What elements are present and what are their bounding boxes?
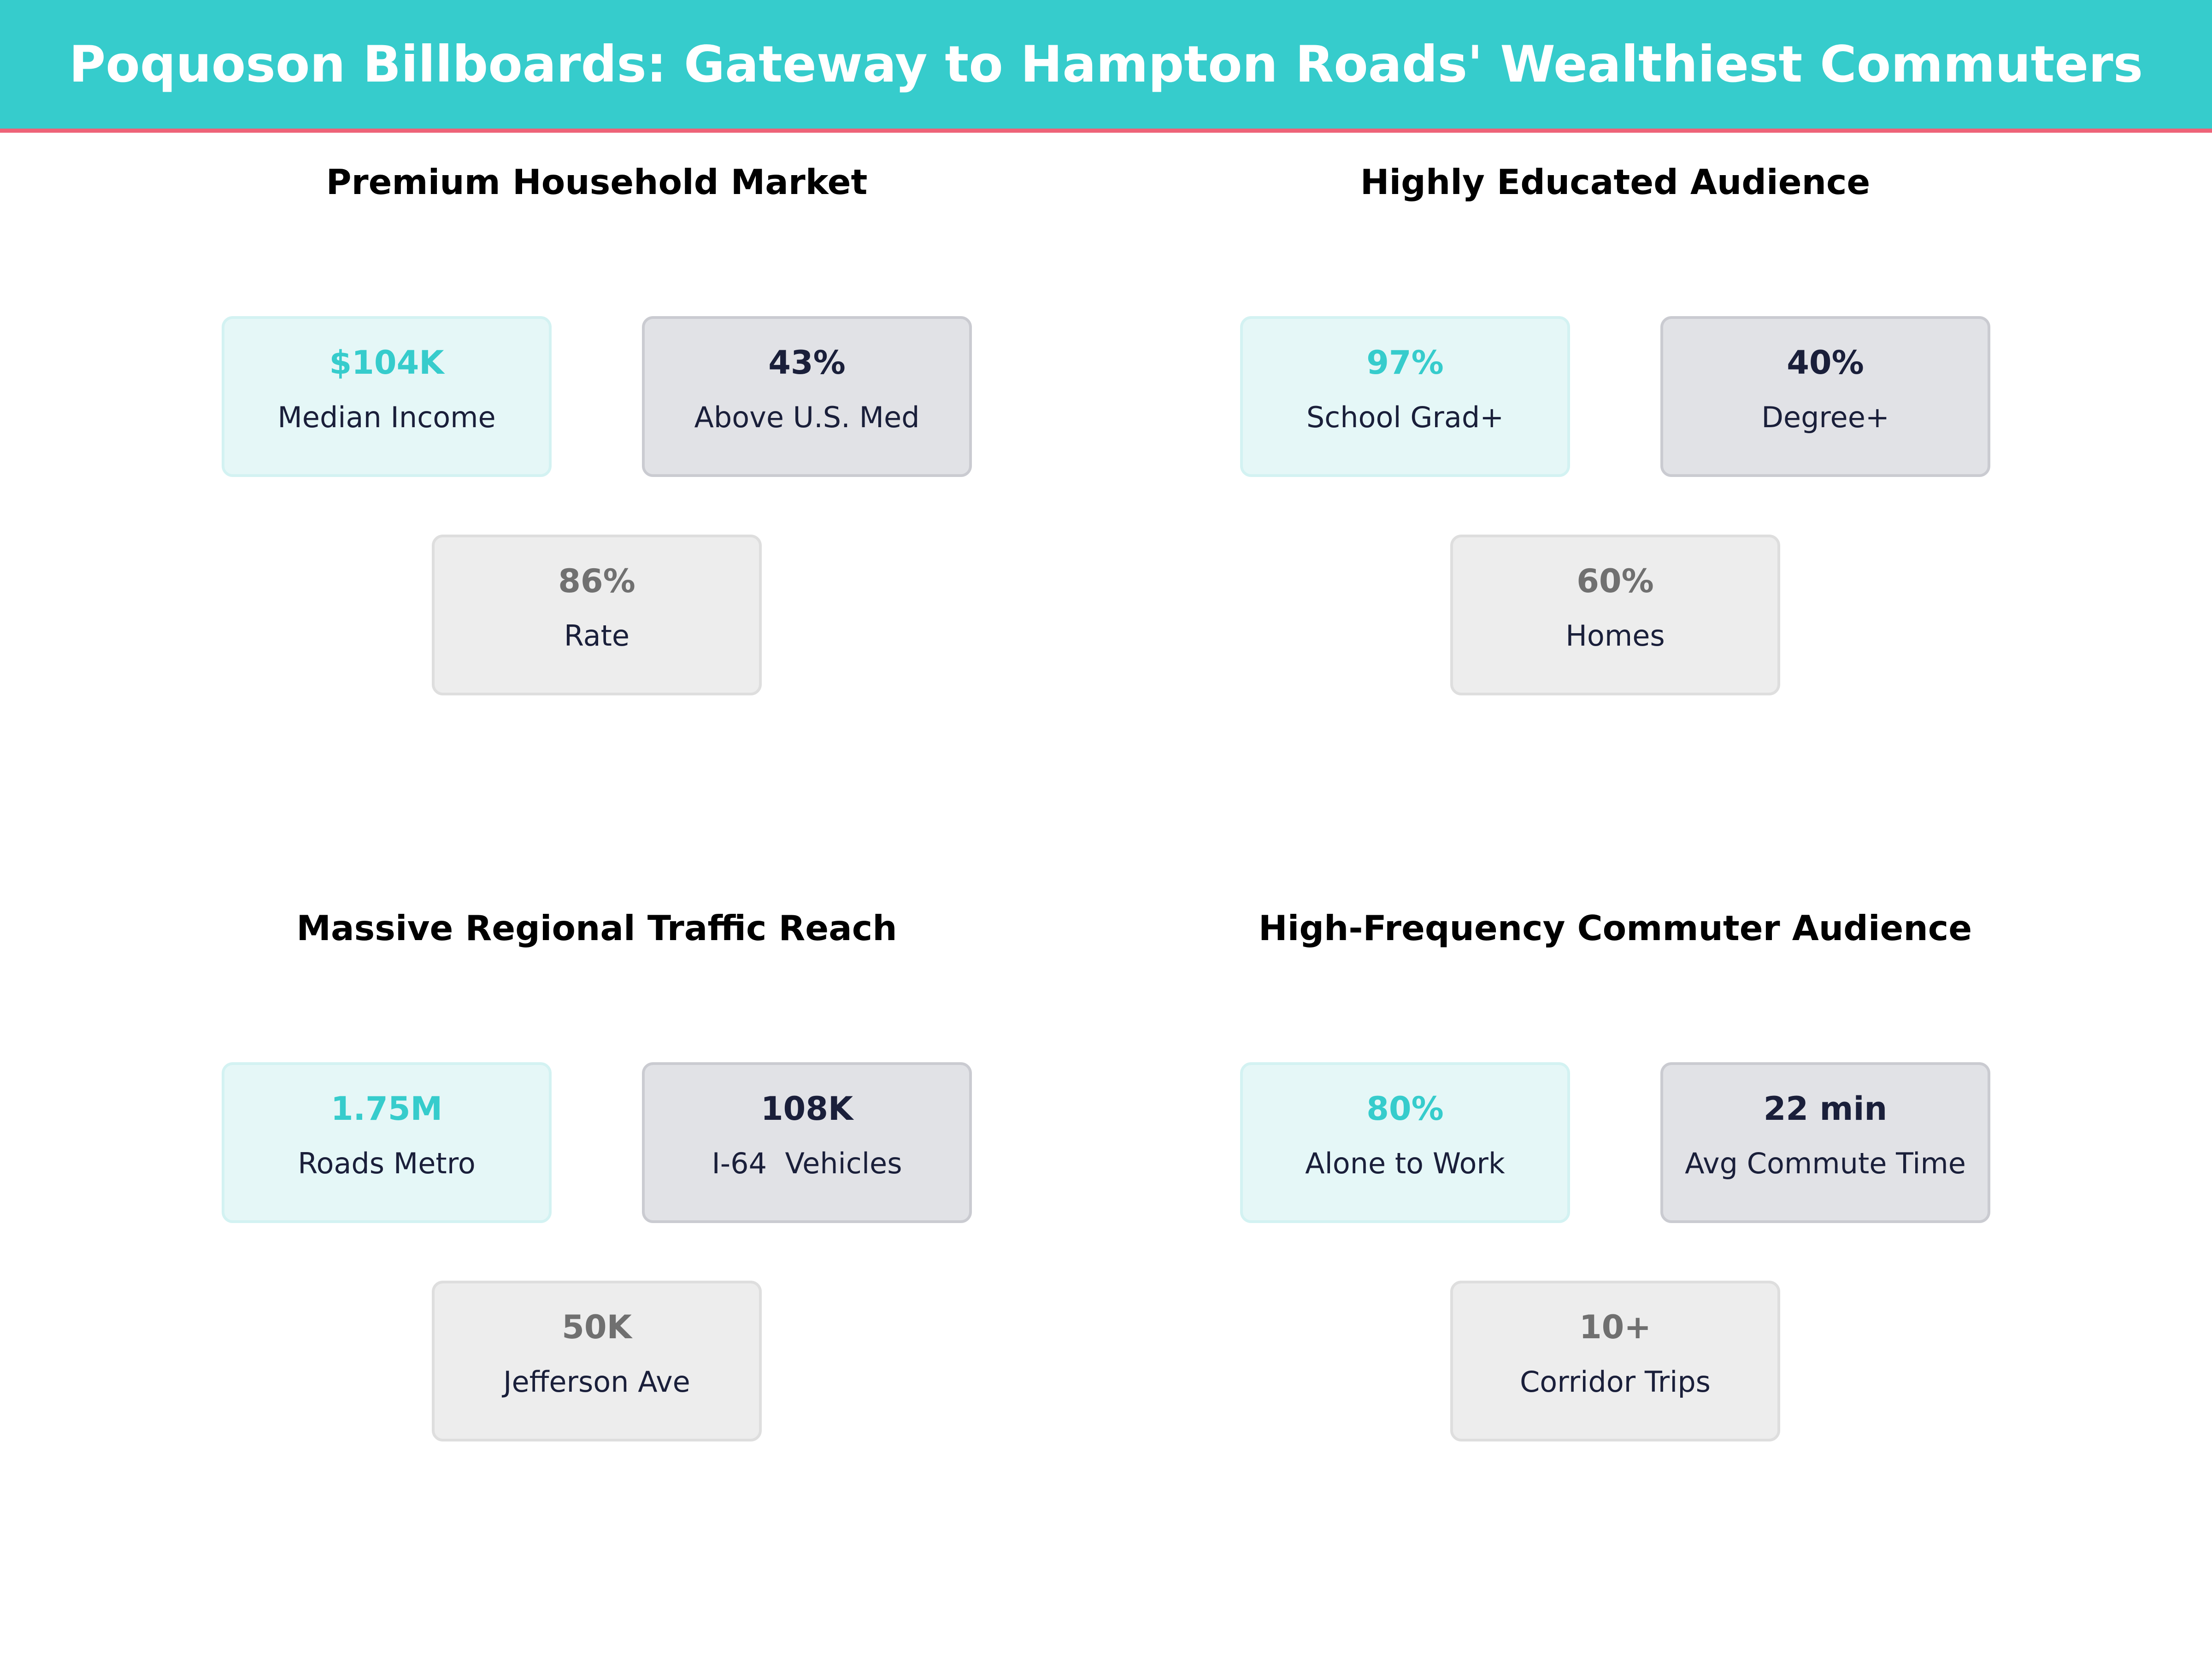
card: corridor trips [1450, 1281, 1780, 1441]
card: homes [1450, 535, 1780, 695]
heading: traffic reach: Massive Regional Traffic Reach [296, 908, 897, 948]
card: I-64 vehicles: I-64 Vehicles [712, 1147, 902, 1180]
card: corridor trips: Corridor Trips [1520, 1365, 1711, 1399]
card: roads metro: 1.75M [331, 1090, 442, 1128]
card: jefferson ave: 50K [562, 1308, 632, 1346]
card: avg commute time: 22 min [1764, 1090, 1887, 1128]
card: jefferson ave [432, 1281, 762, 1441]
card: median income [222, 316, 552, 477]
card: degree [1660, 316, 1990, 477]
header banner [0, 0, 2212, 133]
card: avg commute time: Avg Commute Time [1685, 1147, 1966, 1180]
card: rate: Rate [564, 619, 629, 653]
panel: premium household market [136, 157, 1058, 710]
card: rate [432, 535, 762, 695]
card: I-64 vehicles [642, 1062, 972, 1223]
card: median income: Median Income [277, 400, 496, 434]
card: I-64 vehicles: 108K [761, 1090, 853, 1128]
heading: premium household market: Premium Household Market [326, 162, 867, 202]
card: school grad: 97% [1366, 344, 1444, 382]
card: above US median: Above U.S. Med [694, 400, 920, 434]
panel: highly educated audience [1154, 157, 2076, 710]
card: alone to work: Alone to Work [1305, 1147, 1505, 1180]
card: homes: Homes [1565, 619, 1665, 653]
panel: high-frequency commuter audience [1154, 903, 2076, 1456]
card: jefferson ave: Jefferson Ave [503, 1365, 690, 1399]
card: avg commute time [1660, 1062, 1990, 1223]
card: median income: $104K [329, 344, 444, 382]
card: above US median: 43% [768, 344, 846, 382]
header banner: Poquoson Billboards: Gateway to Hampton Roads' Wealthiest Commuters [69, 35, 2143, 94]
card: above US median [642, 316, 972, 477]
card: degree: 40% [1787, 344, 1864, 382]
card: roads metro [222, 1062, 552, 1223]
card: corridor trips: 10+ [1579, 1308, 1651, 1346]
card: degree: Degree+ [1761, 400, 1889, 434]
card: roads metro: Roads Metro [298, 1147, 476, 1180]
card: homes: 60% [1577, 562, 1654, 600]
card: school grad: School Grad+ [1306, 400, 1504, 434]
card: alone to work: 80% [1366, 1090, 1444, 1128]
panel: massive regional traffic reach [136, 903, 1058, 1456]
card: alone to work [1240, 1062, 1570, 1223]
heading: highly educated audience: Highly Educated Audience [1360, 162, 1870, 202]
heading: commuter audience: High-Frequency Commuter Audience [1259, 908, 1972, 948]
card: school grad [1240, 316, 1570, 477]
card: rate: 86% [558, 562, 635, 600]
